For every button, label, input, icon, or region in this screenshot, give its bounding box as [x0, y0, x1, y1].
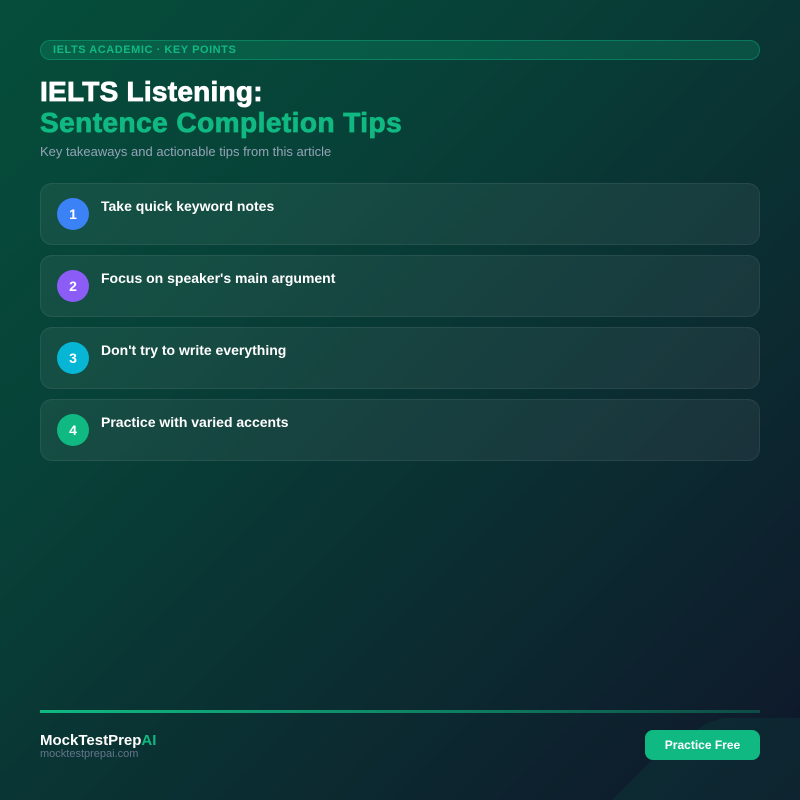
subtitle: Key takeaways and actionable tips from this article [40, 144, 331, 159]
number badge 3: 3 [69, 350, 77, 366]
number badge 1: 1 [69, 206, 77, 222]
title [40, 76, 402, 138]
call to action button [645, 730, 760, 760]
title: IELTS Listening: [40, 76, 263, 107]
tip card 1 [40, 183, 760, 245]
tip text 2: Focus on speaker's main argument [101, 270, 335, 286]
tip card 3 [40, 327, 760, 389]
category tag [40, 40, 760, 60]
tip text 1: Take quick keyword notes [101, 198, 274, 214]
brand name: MockTestPrepAI [40, 732, 156, 749]
footer rule [40, 710, 760, 713]
call to action button: Practice Free [665, 738, 740, 752]
number badge 3 [57, 342, 89, 374]
number badge 1 [57, 198, 89, 230]
tip card 2 [40, 255, 760, 317]
number badge 2: 2 [69, 278, 77, 294]
tip text 4: Practice with varied accents [101, 414, 289, 430]
tip text 3: Don't try to write everything [101, 342, 286, 358]
title: Sentence Completion Tips [40, 107, 402, 138]
tip card 4 [40, 399, 760, 461]
number badge 2 [57, 270, 89, 302]
brand url: mocktestprepai.com [40, 748, 138, 760]
category tag: IELTS ACADEMIC · KEY POINTS [53, 44, 236, 56]
number badge 4 [57, 414, 89, 446]
number badge 4: 4 [69, 422, 77, 438]
brand block [40, 732, 156, 760]
